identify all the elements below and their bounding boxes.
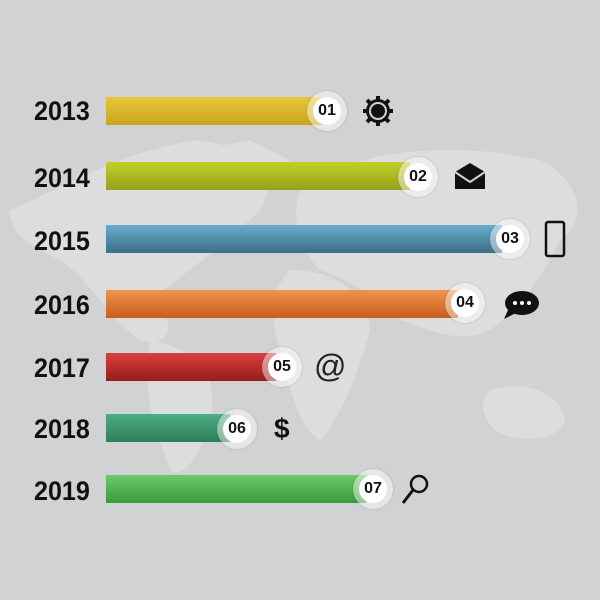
badge 07: 07: [364, 480, 382, 497]
icon: envelope: [454, 163, 486, 189]
year labels: [34, 96, 90, 506]
text: 2013: [34, 96, 90, 126]
badge 03: [490, 219, 530, 259]
badge 05: 05: [273, 358, 291, 375]
bar 2016: [106, 290, 458, 318]
badge 07: [353, 469, 393, 509]
bar 2014: [106, 162, 410, 190]
badge 06: [217, 409, 257, 449]
icon: at sign: @: [314, 348, 346, 384]
text: 2014: [34, 163, 90, 193]
icon: gear: [363, 96, 393, 126]
bar 2019: [106, 475, 366, 503]
badge 06: 06: [228, 420, 246, 437]
badge 01: [307, 91, 347, 131]
bar 2017: [106, 353, 276, 381]
icon: dollar: $: [274, 413, 290, 444]
badge 02: [398, 157, 438, 197]
text: 2018: [34, 414, 90, 444]
badge 02: 02: [409, 168, 427, 185]
badge 04: 04: [456, 294, 474, 311]
icon: chat bubble: [504, 291, 539, 319]
text: 2019: [34, 476, 90, 506]
bar 2015: [106, 225, 502, 253]
text: 2017: [34, 353, 90, 383]
badge 05: [262, 347, 302, 387]
icon: magnifier: [402, 474, 428, 504]
badge 01: 01: [318, 102, 336, 119]
bar 2013: [106, 97, 324, 125]
text: 2016: [34, 290, 90, 320]
icon: phone: [544, 220, 566, 258]
text: 2015: [34, 226, 90, 256]
badge 04: [445, 283, 485, 323]
badge 03: 03: [501, 230, 519, 247]
bar 2018: [106, 414, 230, 442]
